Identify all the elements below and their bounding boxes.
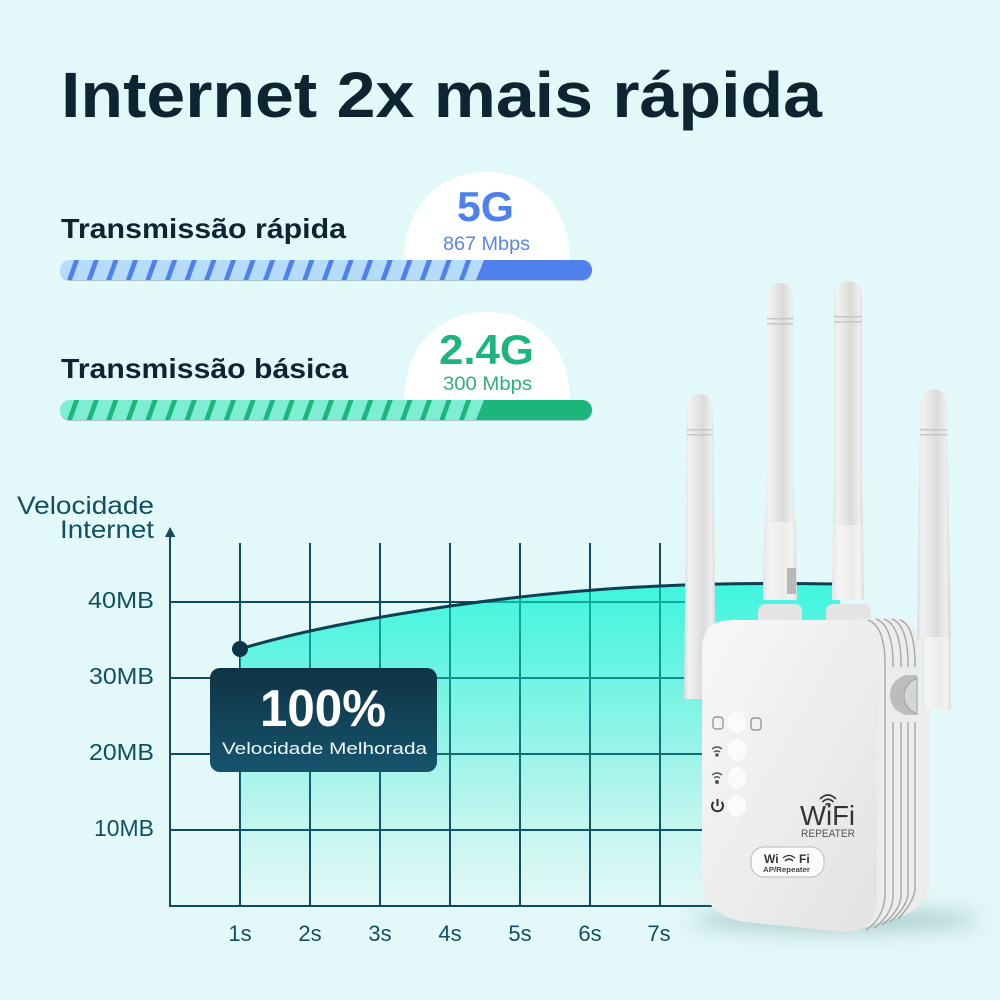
wifi logo — [800, 795, 855, 840]
y axis labels — [88, 587, 154, 841]
router front — [702, 620, 877, 932]
center-right antenna — [826, 281, 871, 622]
y axis labels: 20MB — [89, 739, 154, 765]
5G value: 5G — [457, 183, 514, 230]
y axis title — [17, 492, 154, 544]
x axis labels: 3s — [368, 921, 392, 946]
grid lines — [170, 543, 704, 906]
axes — [170, 534, 712, 906]
router shadow — [690, 909, 980, 931]
5G rate: 867 Mbps — [443, 234, 530, 255]
2.4G value: 2.4G — [439, 326, 534, 373]
wifi logo: REPEATER — [801, 828, 855, 840]
status icons — [712, 717, 761, 811]
y axis title: Internet — [60, 516, 154, 544]
2.4G label: Transmissão básica — [61, 353, 348, 384]
router product illustration — [684, 281, 980, 932]
wifi badge — [751, 847, 824, 877]
callout caption: Velocidade Melhorada — [222, 739, 428, 758]
wifi badge: Fi — [799, 852, 810, 866]
x axis labels: 6s — [578, 921, 602, 946]
y axis title: Velocidade — [17, 492, 154, 520]
title: Internet 2x mais rápida — [61, 59, 822, 131]
x axis labels: 4s — [438, 921, 462, 946]
y axis labels: 40MB — [88, 587, 154, 613]
wifi badge: AP/Repeater — [763, 867, 810, 874]
wifi logo: WiFi — [800, 800, 855, 831]
wifi badge: Wi — [764, 852, 779, 866]
area chart — [17, 492, 840, 946]
y axis labels: 30MB — [89, 663, 154, 689]
curve line — [240, 583, 840, 649]
filled area under curve — [240, 583, 840, 906]
panel: 5G speed — [60, 172, 592, 281]
5G label: Transmissão rápida — [61, 213, 346, 244]
x axis labels: 2s — [298, 921, 322, 946]
callout value: 100% — [260, 680, 386, 738]
callout — [210, 668, 437, 772]
x axis labels — [228, 921, 671, 946]
left antenna — [684, 394, 716, 699]
start point — [232, 641, 248, 657]
side fins — [850, 618, 930, 932]
grid lines inside area — [240, 588, 702, 905]
panel: 2.4G speed — [60, 312, 592, 421]
center-left antenna — [758, 283, 802, 622]
2.4G bar — [60, 400, 592, 421]
LED lights — [728, 711, 746, 817]
y axis labels: 10MB — [94, 815, 154, 841]
right antenna — [917, 390, 951, 710]
2.4G rate: 300 Mbps — [443, 374, 532, 395]
x axis labels: 5s — [508, 921, 532, 946]
hinge knob — [890, 675, 917, 715]
x axis labels: 7s — [647, 921, 671, 946]
axis arrow — [165, 527, 176, 537]
x axis labels: 1s — [228, 921, 252, 946]
5G dome — [404, 172, 570, 262]
5G bar — [60, 260, 592, 281]
2.4G dome — [404, 312, 570, 402]
